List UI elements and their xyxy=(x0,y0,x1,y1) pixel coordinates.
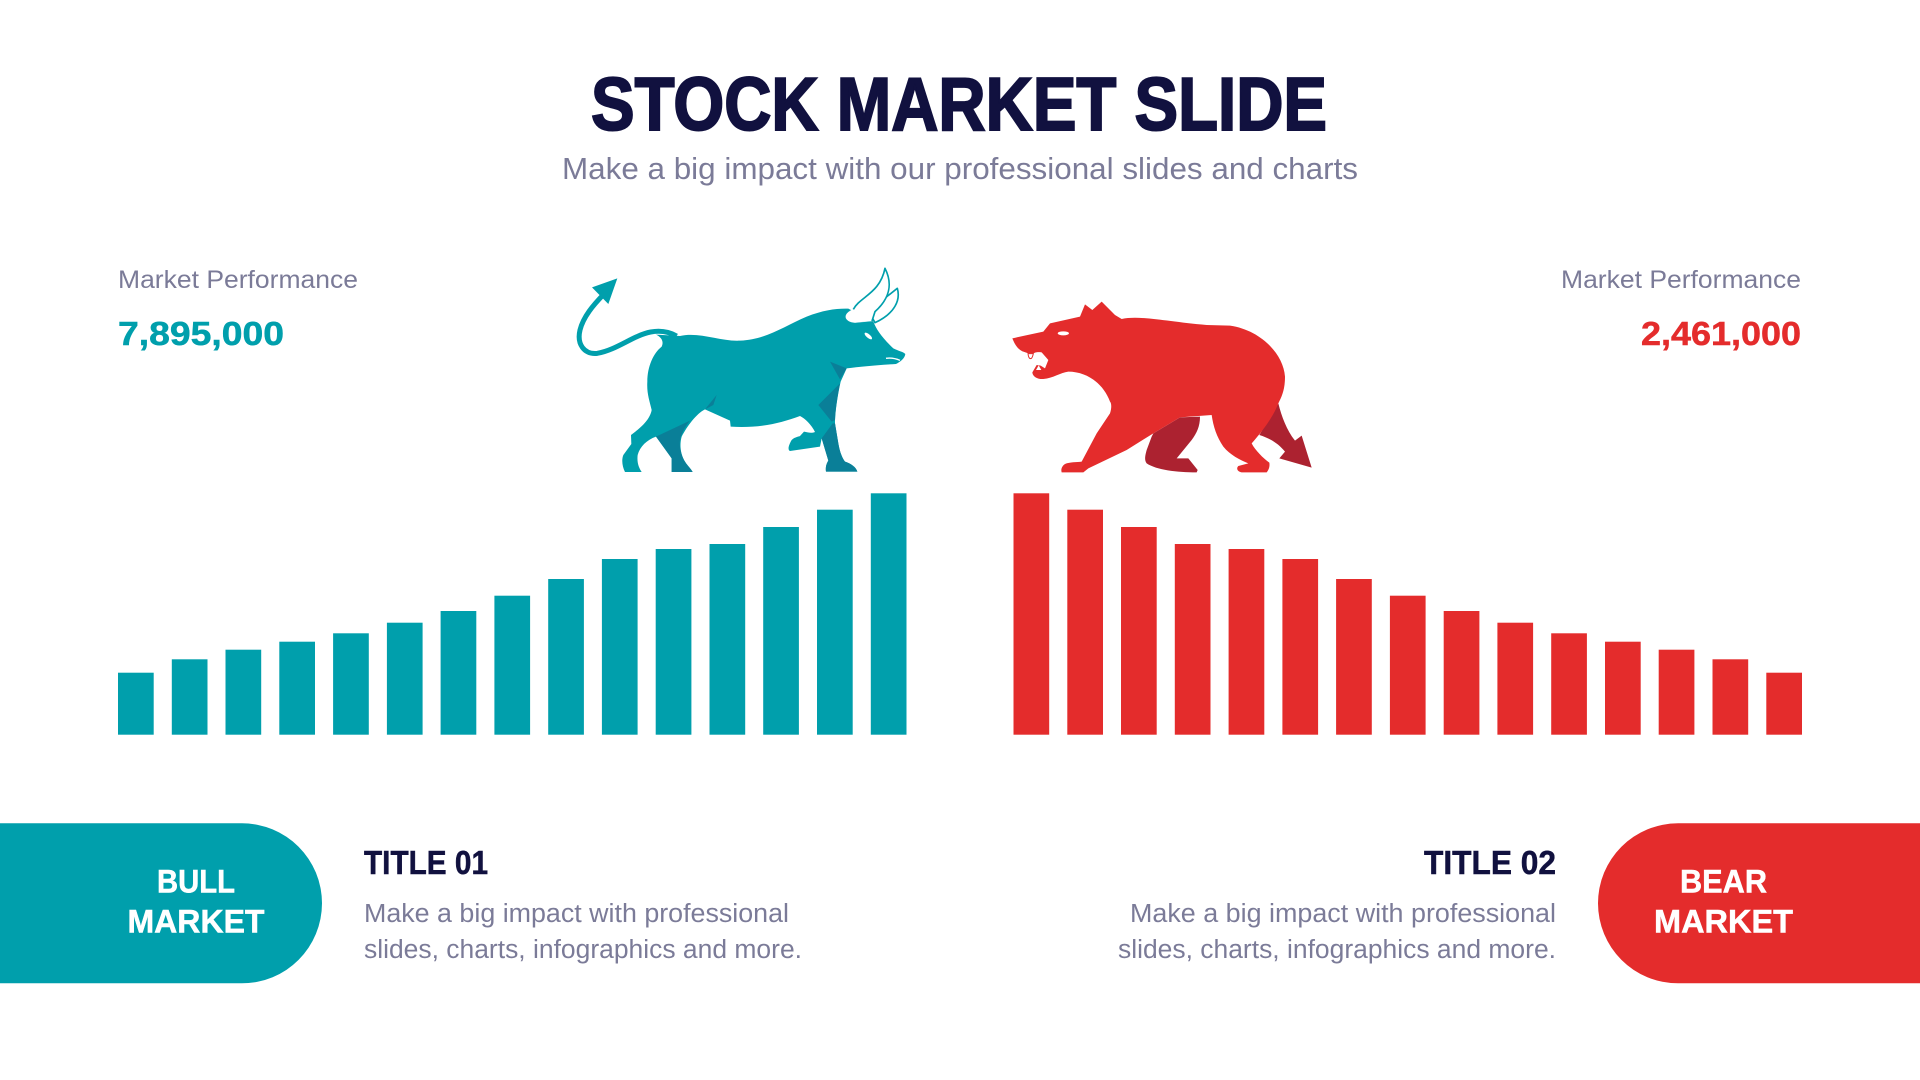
bull market pill: BULL xyxy=(157,863,235,899)
bear market performance: Market Performance xyxy=(1561,266,1801,294)
text block: title 02: Make a big impact with professional xyxy=(1130,900,1556,928)
text block: title 02: TITLE 02 xyxy=(1424,844,1556,881)
icon: bull xyxy=(579,268,905,472)
bull market performance: 7,895,000 xyxy=(118,315,284,352)
bear market pill: MARKET xyxy=(1654,904,1793,940)
bear bar chart xyxy=(1014,493,1802,735)
icon: bear xyxy=(1012,302,1312,472)
subtitle: Make a big impact with our professional slides and charts xyxy=(562,151,1358,186)
bull market pill xyxy=(0,823,322,983)
text block: title 02: slides, charts, infographics and more. xyxy=(1118,936,1556,964)
title: STOCK MARKET SLIDE xyxy=(591,62,1327,146)
bear market performance xyxy=(1561,266,1801,352)
text block: title 01: TITLE 01 xyxy=(364,844,488,881)
text block: title 01: Make a big impact with professional xyxy=(364,900,789,928)
bear market pill xyxy=(1598,823,1920,983)
bear market performance: 2,461,000 xyxy=(1641,315,1801,352)
bull market pill: MARKET xyxy=(128,904,265,940)
bull market performance xyxy=(118,266,358,352)
text block: title 01 xyxy=(364,844,802,964)
bear market pill: BEAR xyxy=(1680,863,1767,899)
bull bar chart xyxy=(118,493,906,735)
bull market performance: Market Performance xyxy=(118,266,358,294)
text block: title 01: slides, charts, infographics and more. xyxy=(364,936,802,964)
text block: title 02 xyxy=(1118,844,1556,964)
